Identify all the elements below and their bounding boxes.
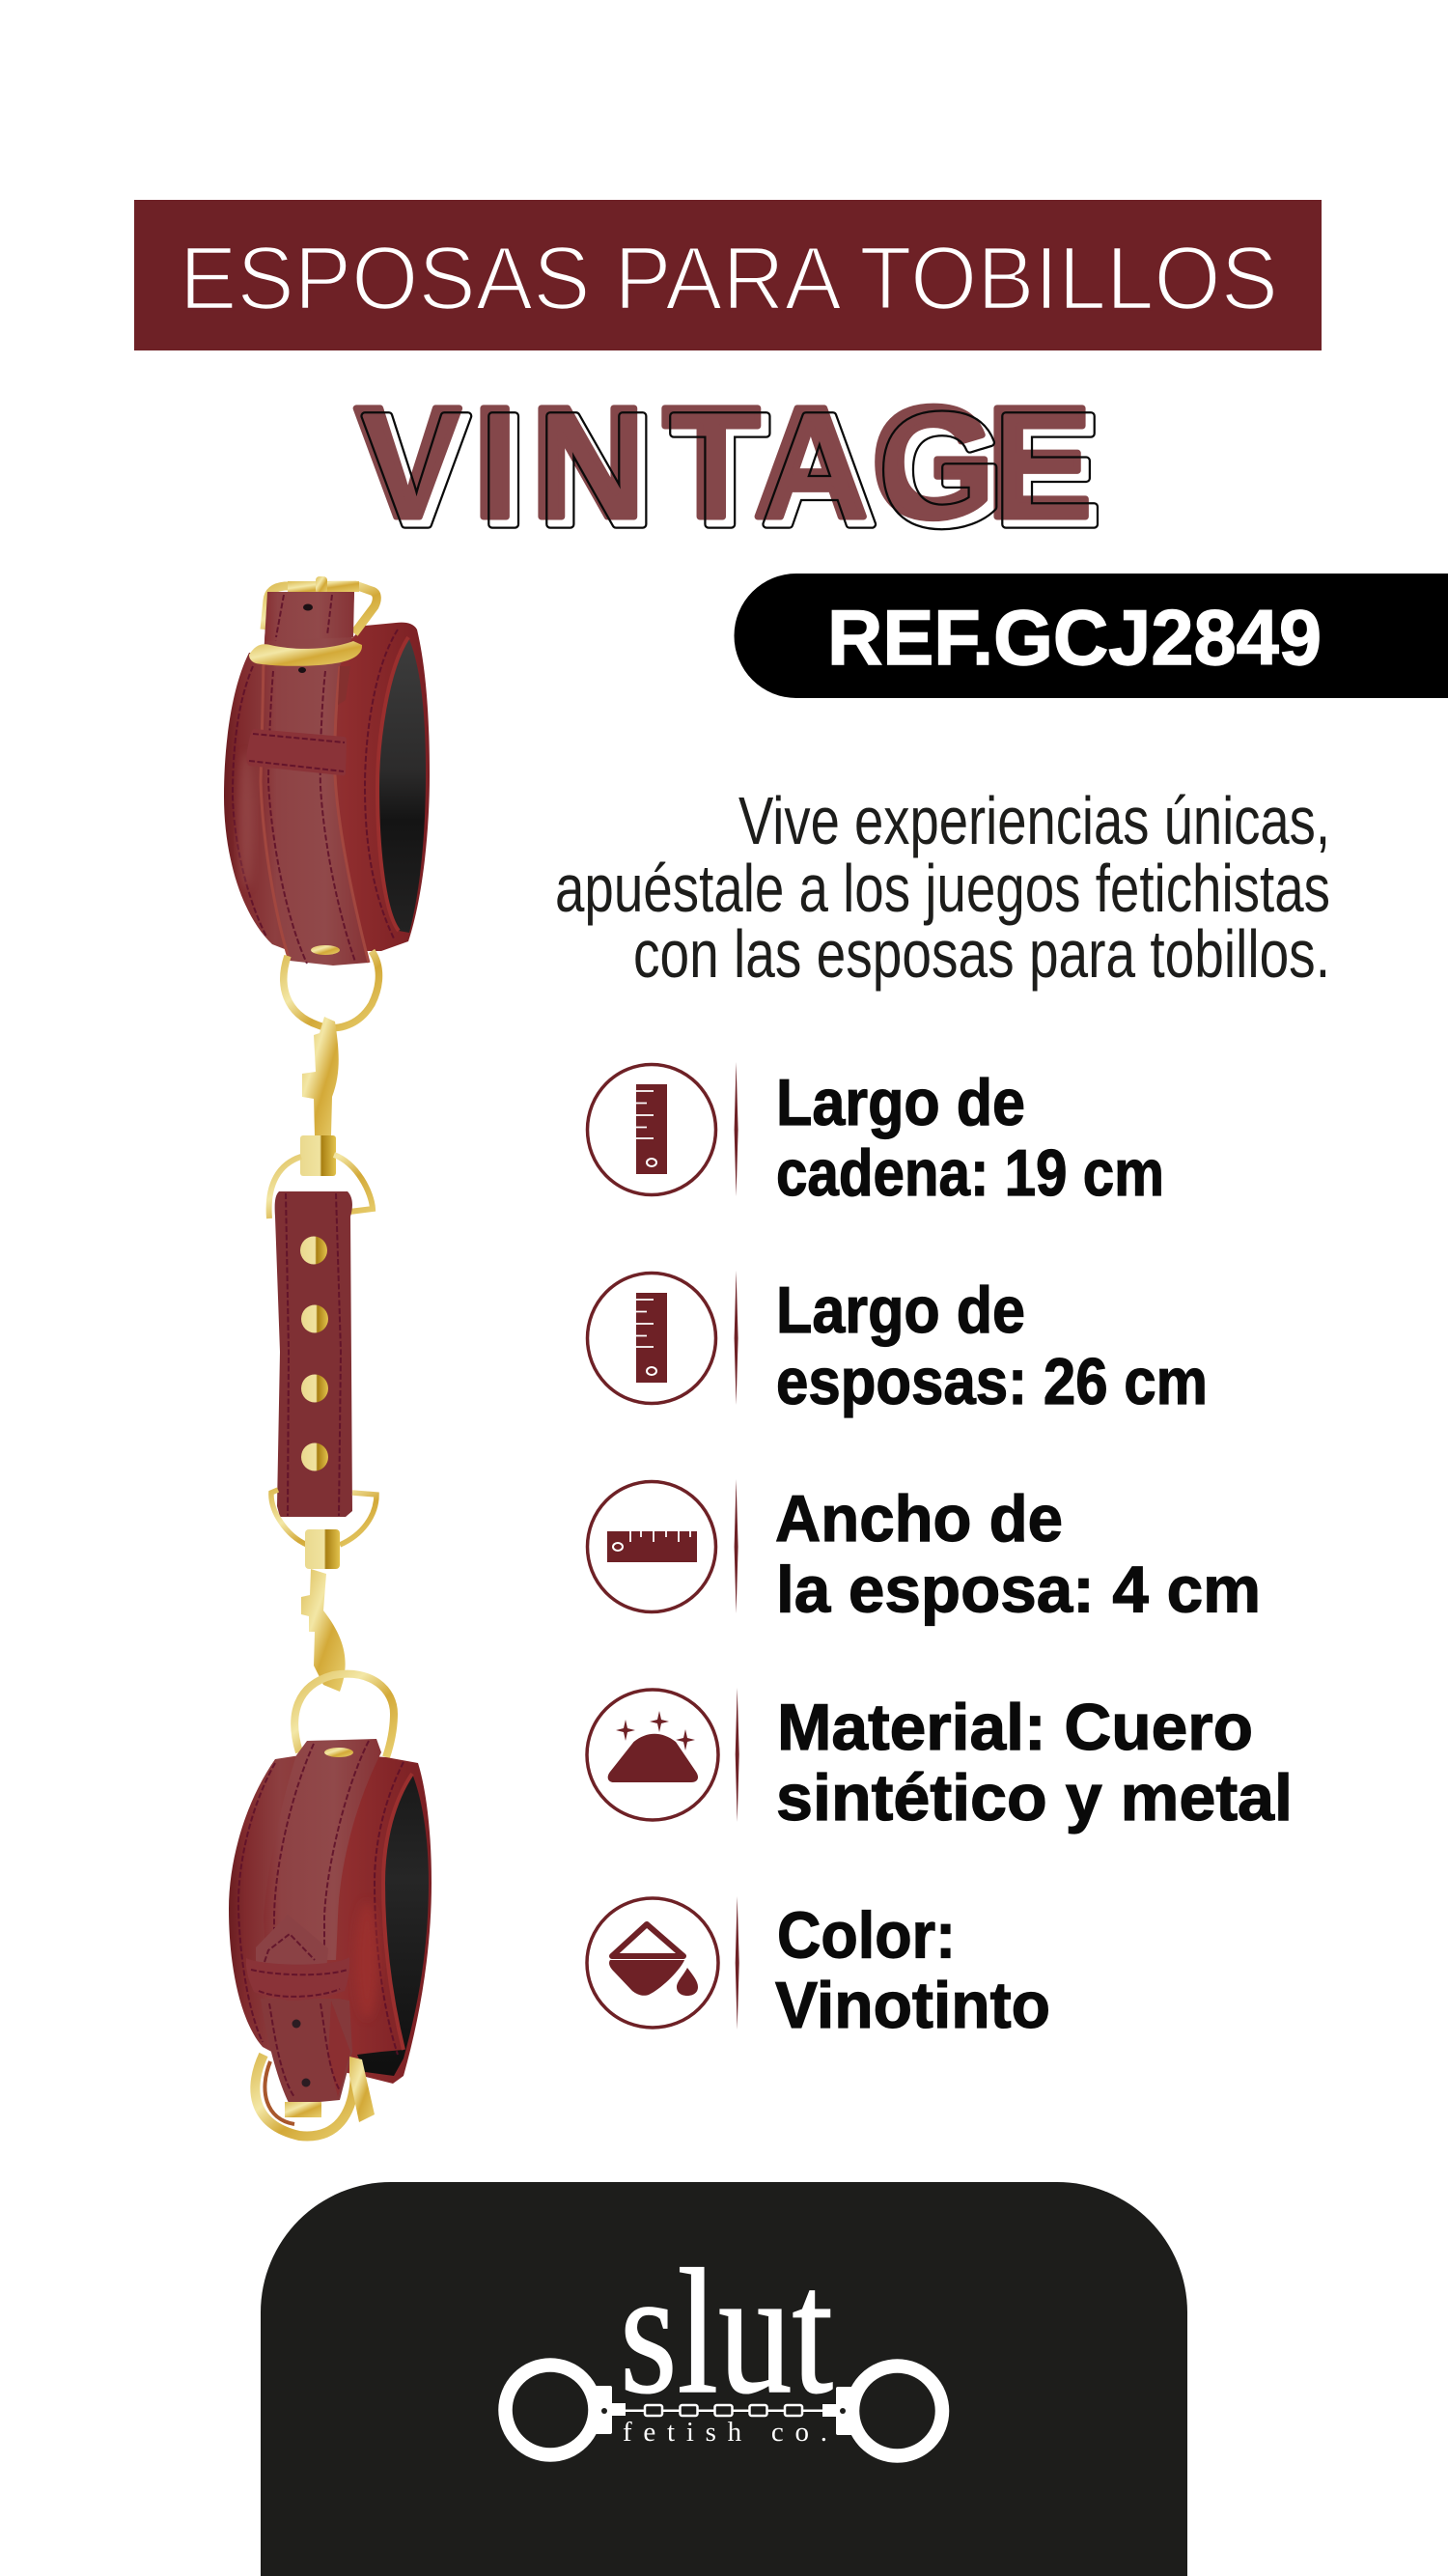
logo [506,2233,942,2456]
divider [736,1688,739,1822]
feature row: cuff width [587,1479,1261,1626]
label: la esposa: 4 cm [776,1553,1261,1626]
top cuff [224,576,430,966]
label: Ancho de [775,1482,1063,1555]
label [775,1482,1261,1626]
label: Largo de [776,1274,1025,1347]
label: esposas: 26 cm [776,1345,1208,1418]
label: cadena: 19 cm [776,1136,1164,1210]
logo: fetish co. [623,2417,827,2448]
feature row: material [587,1688,1293,1834]
footer panel [261,2182,1187,2576]
description text [555,783,1330,992]
divider [735,1271,738,1405]
bottom buckle rings [255,2055,355,2136]
icon: vertical ruler [587,1273,716,1404]
upper D ring and snap hook [269,951,378,1218]
icon: handcuffs [506,2366,942,2456]
divider [735,1062,738,1196]
reference pill [734,574,1448,698]
title banner [134,200,1322,350]
connecting strap with rivets [275,1191,352,1517]
label: sintético y metal [776,1761,1293,1834]
icon: shiny mound [587,1690,718,1820]
icon: horizontal ruler [587,1481,716,1612]
label: Vinotinto [775,1969,1050,2042]
top buckle [265,585,376,633]
product photo: ankle cuffs with chain [224,576,432,2136]
divider [736,1896,739,2030]
label [775,1899,1050,2042]
feature row: cuff length [587,1271,1208,1418]
label [776,1274,1208,1418]
label [776,1691,1293,1834]
strap tip [256,1915,328,1972]
lower D ring and snap hook [271,1490,394,1757]
reference pill: REF.GCJ2849 [827,595,1322,682]
title banner: ESPOSAS PARA TOBILLOS [180,228,1278,328]
bottom cuff [229,1739,432,2136]
label: Material: Cuero [777,1691,1253,1764]
soft body highlight [238,753,254,888]
label [776,1066,1164,1210]
heading: VINTAGE offset outline: VINTAGE [355,374,1092,550]
label: Largo de [776,1066,1025,1139]
keeper loop [246,1957,349,2001]
keeper loop [246,729,347,775]
logo: slut [620,2233,833,2431]
strap below keeper [261,1999,352,2105]
cuff rivet [311,945,340,955]
feature row: colour [587,1896,1050,2042]
feature row: chain length [587,1062,1164,1210]
divider [735,1479,738,1613]
icon: paint bucket and drop [587,1898,718,2028]
icon: vertical ruler [587,1064,716,1195]
label: Color: [777,1899,956,1973]
